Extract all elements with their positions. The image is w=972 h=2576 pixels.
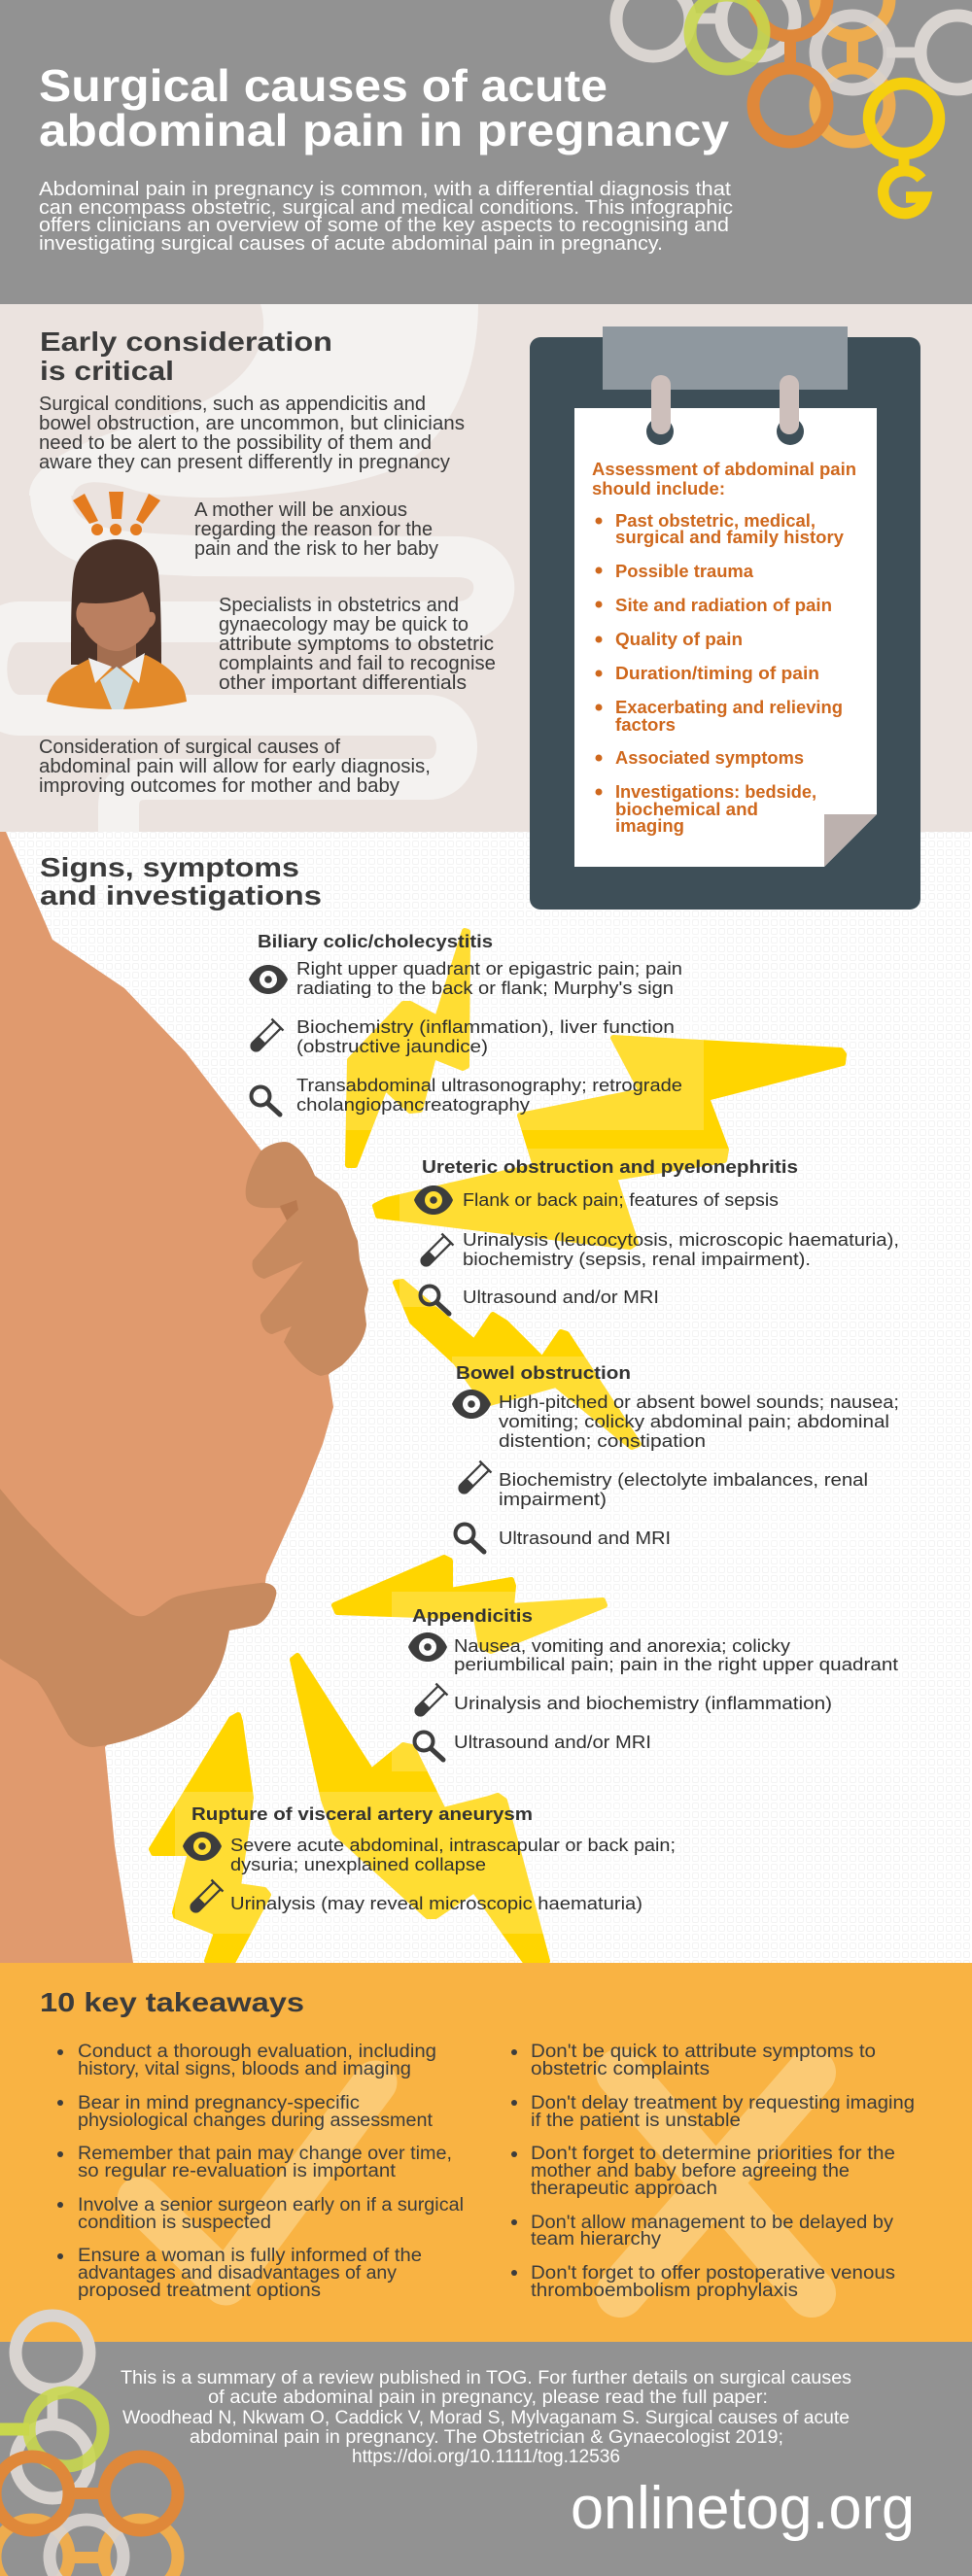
list: don't: therapeutic approach: [531, 2179, 717, 2199]
text: mother: pain and the risk to her baby: [194, 538, 438, 560]
list: do: history, vital signs, bloods and imaging: [78, 2059, 411, 2079]
list: do: Bear in mind pregnancy-specific: [78, 2093, 360, 2113]
clipboard heading: [592, 460, 856, 498]
heading: Early consideration: [40, 326, 332, 357]
panel: early consideration: [0, 304, 972, 836]
citation text: [121, 2368, 851, 2467]
clipboard list: [595, 511, 844, 836]
clipboard list: Site and radiation of pain: [615, 596, 832, 615]
title: abdominal pain in pregnancy: [39, 105, 729, 155]
block: ureteric obstruction and pyelonephritis: Flank or back pain; features of sepsis: [463, 1189, 779, 1210]
block: appendicitis: Ultrasound and/or MRI: [454, 1732, 651, 1752]
list: don't: Don't be quick to attribute symptoms to: [531, 2042, 876, 2062]
block: appendicitis: periumbilical pain; pain in the right upper quadrant: [454, 1654, 898, 1674]
block: biliary colic/cholecystitis: radiating to the back or flank; Murphy's sign: [296, 978, 674, 998]
block: bowel obstruction: distention; constipation: [499, 1430, 706, 1451]
panel: 10 key takeaways: [0, 1963, 972, 2342]
clipboard list: surgical and family history: [615, 528, 844, 547]
block: biliary colic/cholecystitis: (obstructive jaundice): [296, 1036, 488, 1056]
heading: Signs, symptoms: [40, 852, 299, 882]
citation text: https://doi.org/10.1111/tog.12536: [352, 2447, 620, 2467]
list: don't: [511, 2042, 915, 2301]
panel: header: [0, 0, 972, 304]
block: bowel obstruction: vomiting; colicky abdominal pain; abdominal: [499, 1411, 889, 1431]
clipboard list: Past obstetric, medical,: [615, 511, 816, 531]
text: consideration: improving outcomes for mother and baby: [39, 775, 399, 797]
list: don't: team hierarchy: [531, 2229, 662, 2250]
clipboard list: Investigations: bedside,: [615, 782, 816, 802]
block: rupture of visceral artery aneurysm: Rupture of visceral artery aneurysm: [191, 1804, 533, 1824]
list: don't: mother and baby before agreeing the: [531, 2161, 850, 2181]
list: do: physiological changes during assessment: [78, 2111, 434, 2131]
block: bowel obstruction: impairment): [499, 1489, 607, 1509]
block: rupture of visceral artery aneurysm: Urinalysis (may reveal microscopic haematuria): [230, 1893, 642, 1913]
citation text: Woodhead N, Nkwam O, Caddick V, Morad S, Mylvaganam S. Surgical causes of acute: [122, 2408, 850, 2428]
block: bowel obstruction: High-pitched or absent bowel sounds; nausea;: [499, 1391, 899, 1412]
clipboard list: Possible trauma: [615, 562, 754, 581]
text: intro paragraph: Surgical conditions, such as appendicitis and: [39, 394, 426, 415]
list: don't: obstetric complaints: [531, 2059, 710, 2079]
list: do: advantages and disadvantages of any: [78, 2263, 398, 2284]
block: bowel obstruction: [452, 1363, 899, 1552]
list: do: Remember that pain may change over time,: [78, 2144, 452, 2164]
clipboard list: imaging: [615, 816, 684, 836]
text: specialists: other important differentials: [219, 672, 467, 694]
title: [39, 60, 729, 155]
block: appendicitis: Nausea, vomiting and anorexia; colicky: [454, 1635, 791, 1656]
list: don't: Don't forget to determine priorities for the: [531, 2144, 895, 2164]
text: intro paragraph: aware they can present differently in pregnancy: [39, 452, 450, 473]
heading: [40, 326, 332, 386]
list: do: so regular re-evaluation is important: [78, 2161, 397, 2181]
intro text: offers clinicians an overview of some of the key aspects to recognising and: [39, 215, 729, 236]
block: bowel obstruction: Bowel obstruction: [456, 1363, 631, 1383]
panel: signs, symptoms and investigations: [0, 832, 972, 1963]
block: biliary colic/cholecystitis: Right upper quadrant or epigastric pain; pain: [296, 958, 682, 979]
block: ureteric obstruction and pyelonephritis: [414, 1157, 899, 1314]
text: consideration: abdominal pain will allow for early diagnosis,: [39, 756, 431, 777]
list: do: [57, 2042, 464, 2301]
text: mother: A mother will be anxious: [194, 499, 407, 521]
block: bowel obstruction: Ultrasound and MRI: [499, 1528, 671, 1548]
block: biliary colic/cholecystitis: [246, 932, 682, 1115]
block: rupture of visceral artery aneurysm: [183, 1804, 676, 1917]
list: do: proposed treatment options: [78, 2281, 321, 2301]
heading: [40, 852, 322, 910]
pregnant body: [0, 832, 368, 1963]
list: do: Ensure a woman is fully informed of the: [78, 2246, 422, 2266]
clipboard list: Quality of pain: [615, 630, 743, 649]
citation text: This is a summary of a review published in TOG. For further details on surgical causes: [121, 2368, 851, 2388]
text-box highlights: [175, 923, 915, 1934]
text: specialists: Specialists in obstetrics and: [219, 595, 459, 616]
block: biliary colic/cholecystitis: Biliary colic/cholecystitis: [258, 932, 493, 951]
block: biliary colic/cholecystitis: Biochemistry (inflammation), liver function: [296, 1016, 675, 1037]
heading: is critical: [40, 356, 174, 386]
watermark: tick: [139, 2082, 375, 2284]
logo: HOG rings: [0, 2316, 178, 2576]
list: don't: Don't allow management to be delayed by: [531, 2213, 894, 2233]
citation text: of acute abdominal pain in pregnancy, please read the full paper:: [208, 2387, 768, 2408]
logo: HOG rings: [616, 0, 972, 214]
text: consideration: [39, 737, 431, 797]
clipboard list: factors: [615, 715, 676, 735]
panel: clipboard assessment: [530, 326, 920, 910]
block: ureteric obstruction and pyelonephritis: Urinalysis (leucocytosis, microscopic haematuria),: [463, 1229, 899, 1250]
icon: anxious mother: [47, 492, 187, 709]
heading: 10 key takeaways: [40, 1987, 304, 2017]
citation text: abdominal pain in pregnancy. The Obstetrician & Gynaecologist 2019;: [190, 2427, 783, 2448]
block: ureteric obstruction and pyelonephritis: Ureteric obstruction and pyelonephritis: [422, 1157, 798, 1177]
block: bowel obstruction: Biochemistry (electolyte imbalances, renal: [499, 1469, 868, 1490]
list: don't: thromboembolism prophylaxis: [531, 2281, 798, 2301]
intestine background shape: [0, 304, 494, 836]
clipboard list: Associated symptoms: [615, 748, 804, 768]
block: rupture of visceral artery aneurysm: dysuria; unexplained collapse: [230, 1854, 486, 1874]
pain bolts: [152, 931, 844, 1961]
text: specialists: complaints and fail to recognise: [219, 653, 496, 674]
text: consideration: Consideration of surgical causes of: [39, 737, 340, 758]
block: biliary colic/cholecystitis: cholangiopancreatography: [296, 1094, 531, 1115]
list: don't: if the patient is unstable: [531, 2111, 741, 2131]
list: do: condition is suspected: [78, 2213, 271, 2233]
intro text: investigating surgical causes of acute abdominal pain in pregnancy.: [39, 233, 663, 255]
block: appendicitis: Urinalysis and biochemistry (inflammation): [454, 1693, 832, 1713]
clipboard heading: Assessment of abdominal pain: [592, 460, 856, 479]
clipboard list: Duration/timing of pain: [615, 664, 819, 683]
text: mother: regarding the reason for the: [194, 519, 433, 540]
intro text: [39, 179, 733, 255]
intro text: Abdominal pain in pregnancy is common, with a differential diagnosis that: [39, 179, 731, 200]
block: biliary colic/cholecystitis: Transabdominal ultrasonography; retrograde: [296, 1075, 682, 1095]
clipboard list: Exacerbating and relieving: [615, 698, 843, 717]
text: intro paragraph: need to be alert to the possibility of them and: [39, 432, 432, 454]
website: onlinetog.org: [571, 2475, 915, 2542]
list: don't: Don't delay treatment by requesting imaging: [531, 2093, 915, 2113]
list: do: Conduct a thorough evaluation, including: [78, 2042, 436, 2062]
title: Surgical causes of acute: [39, 60, 608, 111]
clipboard heading: should include:: [592, 479, 725, 498]
block: appendicitis: Appendicitis: [412, 1606, 533, 1626]
text: intro paragraph: bowel obstruction, are uncommon, but clinicians: [39, 413, 465, 434]
intro text: can encompass obstetric, surgical and medical conditions. This infographic: [39, 197, 733, 219]
block: ureteric obstruction and pyelonephritis: Ultrasound and/or MRI: [463, 1287, 659, 1307]
list: do: Involve a senior surgeon early on if a surgical: [78, 2195, 464, 2215]
text: intro paragraph: [39, 394, 465, 473]
list: don't: Don't forget to offer postoperative venous: [531, 2263, 895, 2284]
watermark: cross: [620, 2073, 812, 2293]
text: specialists: [219, 595, 496, 694]
text: mother: [194, 499, 438, 560]
heading: and investigations: [40, 880, 322, 910]
text: specialists: gynaecology may be quick to: [219, 614, 469, 635]
block: appendicitis: [408, 1606, 898, 1760]
panel: footer: [0, 2316, 972, 2576]
block: rupture of visceral artery aneurysm: Severe acute abdominal, intrascapular or back pain;: [230, 1835, 676, 1855]
clipboard list: biochemical and: [615, 800, 758, 819]
text: specialists: attribute symptoms to obstetric: [219, 634, 494, 655]
block: ureteric obstruction and pyelonephritis: biochemistry (sepsis, renal impairment).: [463, 1249, 811, 1269]
